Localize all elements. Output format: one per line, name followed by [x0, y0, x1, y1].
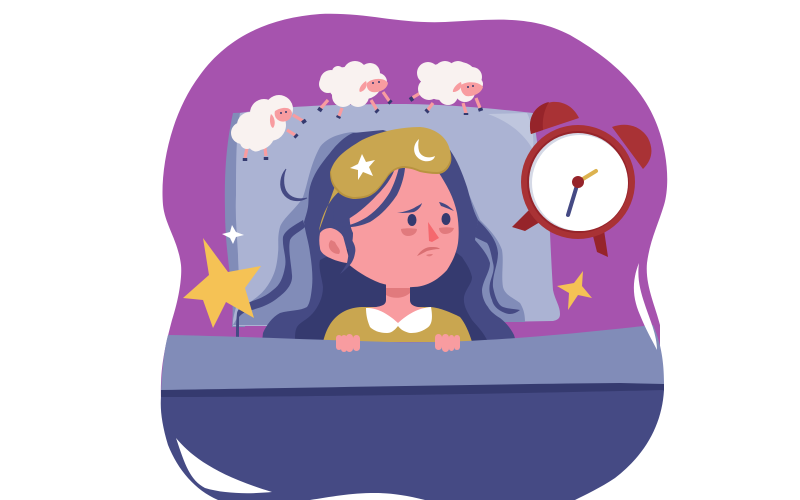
- hair strand left: [236, 220, 305, 337]
- blanket: [161, 263, 664, 500]
- moon on mask: [414, 139, 435, 161]
- sheep 3: [410, 61, 483, 115]
- hooves: [319, 101, 391, 118]
- legs: [320, 92, 390, 116]
- blanket lower: [161, 390, 664, 500]
- hooves: [245, 120, 305, 161]
- pillow face: [233, 104, 560, 326]
- right eye: [442, 213, 450, 225]
- minute hand: [568, 182, 578, 215]
- hour hand: [578, 171, 596, 182]
- right foot: [592, 230, 608, 257]
- wool: [417, 61, 483, 105]
- blanket dark band: [161, 383, 664, 398]
- left eye: [408, 214, 416, 226]
- hooves: [410, 98, 481, 115]
- legs: [245, 115, 303, 158]
- yellow star large: [183, 238, 261, 328]
- left cheek: [401, 228, 417, 236]
- left bell: [530, 102, 579, 134]
- pillow: [225, 104, 560, 327]
- right cheek: [439, 227, 454, 234]
- fringe hair: [333, 168, 395, 224]
- pillow corner highlight: [488, 113, 533, 150]
- pillow back edge: [225, 112, 262, 327]
- alarm clock: [512, 102, 651, 257]
- lower lip: [426, 254, 433, 256]
- face and ear: [319, 167, 459, 287]
- hair main: [262, 130, 516, 342]
- collar: [366, 307, 432, 333]
- sideburn: [338, 225, 355, 274]
- star on mask: [350, 154, 375, 180]
- white sparkle: [222, 225, 244, 244]
- right bell: [612, 125, 651, 169]
- left bell shade: [530, 102, 549, 134]
- ear: [359, 81, 367, 92]
- hair inner dark: [295, 240, 488, 342]
- fringe strand: [342, 167, 405, 227]
- nose: [428, 222, 439, 242]
- neck: [367, 280, 425, 326]
- clock inner rim: [527, 131, 629, 233]
- sheep 1: [231, 95, 305, 161]
- right brow: [439, 202, 454, 211]
- ear: [319, 228, 350, 263]
- ear: [453, 82, 461, 92]
- inner ear: [329, 240, 340, 254]
- clock rim: [521, 125, 635, 239]
- neck shadow: [386, 288, 410, 298]
- mouth: [417, 247, 440, 256]
- right fingers: [435, 334, 460, 352]
- left foot: [512, 210, 540, 231]
- wool: [319, 61, 387, 107]
- head: [275, 108, 292, 122]
- hair outer shadow: [233, 132, 525, 325]
- blanket fold: [161, 325, 664, 392]
- hair strand right: [475, 220, 520, 314]
- clock face: [532, 135, 628, 231]
- white sliver right: [634, 263, 657, 350]
- mask body: [331, 127, 450, 197]
- left fingers: [336, 334, 360, 352]
- sleep mask: [319, 127, 451, 231]
- curl: [281, 169, 307, 201]
- head: [461, 82, 483, 96]
- mask band: [319, 186, 341, 231]
- white sliver bottom: [176, 438, 272, 493]
- clock face shade: [529, 133, 627, 231]
- head: [367, 79, 388, 92]
- sheep 2: [319, 61, 391, 118]
- purple background blob: [161, 14, 667, 400]
- sweater: [323, 307, 472, 342]
- hair: [233, 130, 525, 342]
- ear: [270, 114, 275, 128]
- face: [347, 167, 459, 287]
- wool: [231, 95, 293, 152]
- mask shadow: [330, 128, 451, 199]
- yellow star small: [557, 271, 592, 310]
- legs: [412, 92, 480, 113]
- left brow: [397, 203, 422, 213]
- clock pivot: [572, 176, 584, 188]
